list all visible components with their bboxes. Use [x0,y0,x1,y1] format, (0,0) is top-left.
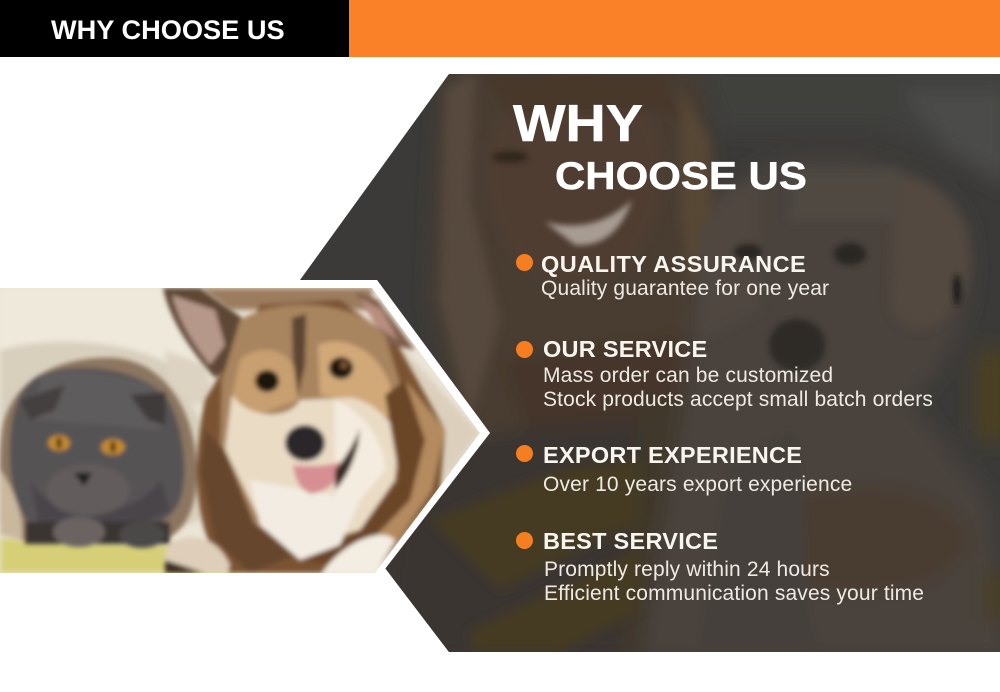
feature heading: QUALITY ASSURANCE [541,251,806,277]
dark background photo of woman and dog [290,60,1000,660]
corgi body [197,300,445,573]
feature: export experience [516,442,852,496]
heading: CHOOSE US: CHOOSE US [555,155,807,198]
heading: WHY: WHY [513,95,643,153]
feature text: Efficient communication saves your time [544,582,924,605]
feature heading: EXPORT EXPERIENCE [543,442,802,468]
banner title: WHY CHOOSE US [51,14,285,45]
cat [10,368,184,535]
pet photo of cat and corgi [0,288,490,578]
feature text: Quality guarantee for one year [541,277,829,300]
feature text: Mass order can be customized [543,364,833,387]
feature heading: OUR SERVICE [543,336,707,362]
hood trim [0,358,197,540]
feature text: Stock products accept small batch orders [543,388,933,411]
bullet [516,341,533,358]
bullet [516,532,533,549]
top banner [0,0,1000,57]
white frame around pet photo [0,280,490,580]
banner title block [0,0,349,57]
feature text: Promptly reply within 24 hours [544,558,830,581]
feature heading: BEST SERVICE [543,528,718,554]
feature: quality assurance [516,251,829,300]
feature text [544,558,924,605]
feature: our service [516,336,933,411]
bullet [516,254,533,271]
feature text [543,364,933,411]
bullet [516,445,533,462]
feature text: Over 10 years export experience [543,473,852,496]
feature: best service [516,528,924,605]
